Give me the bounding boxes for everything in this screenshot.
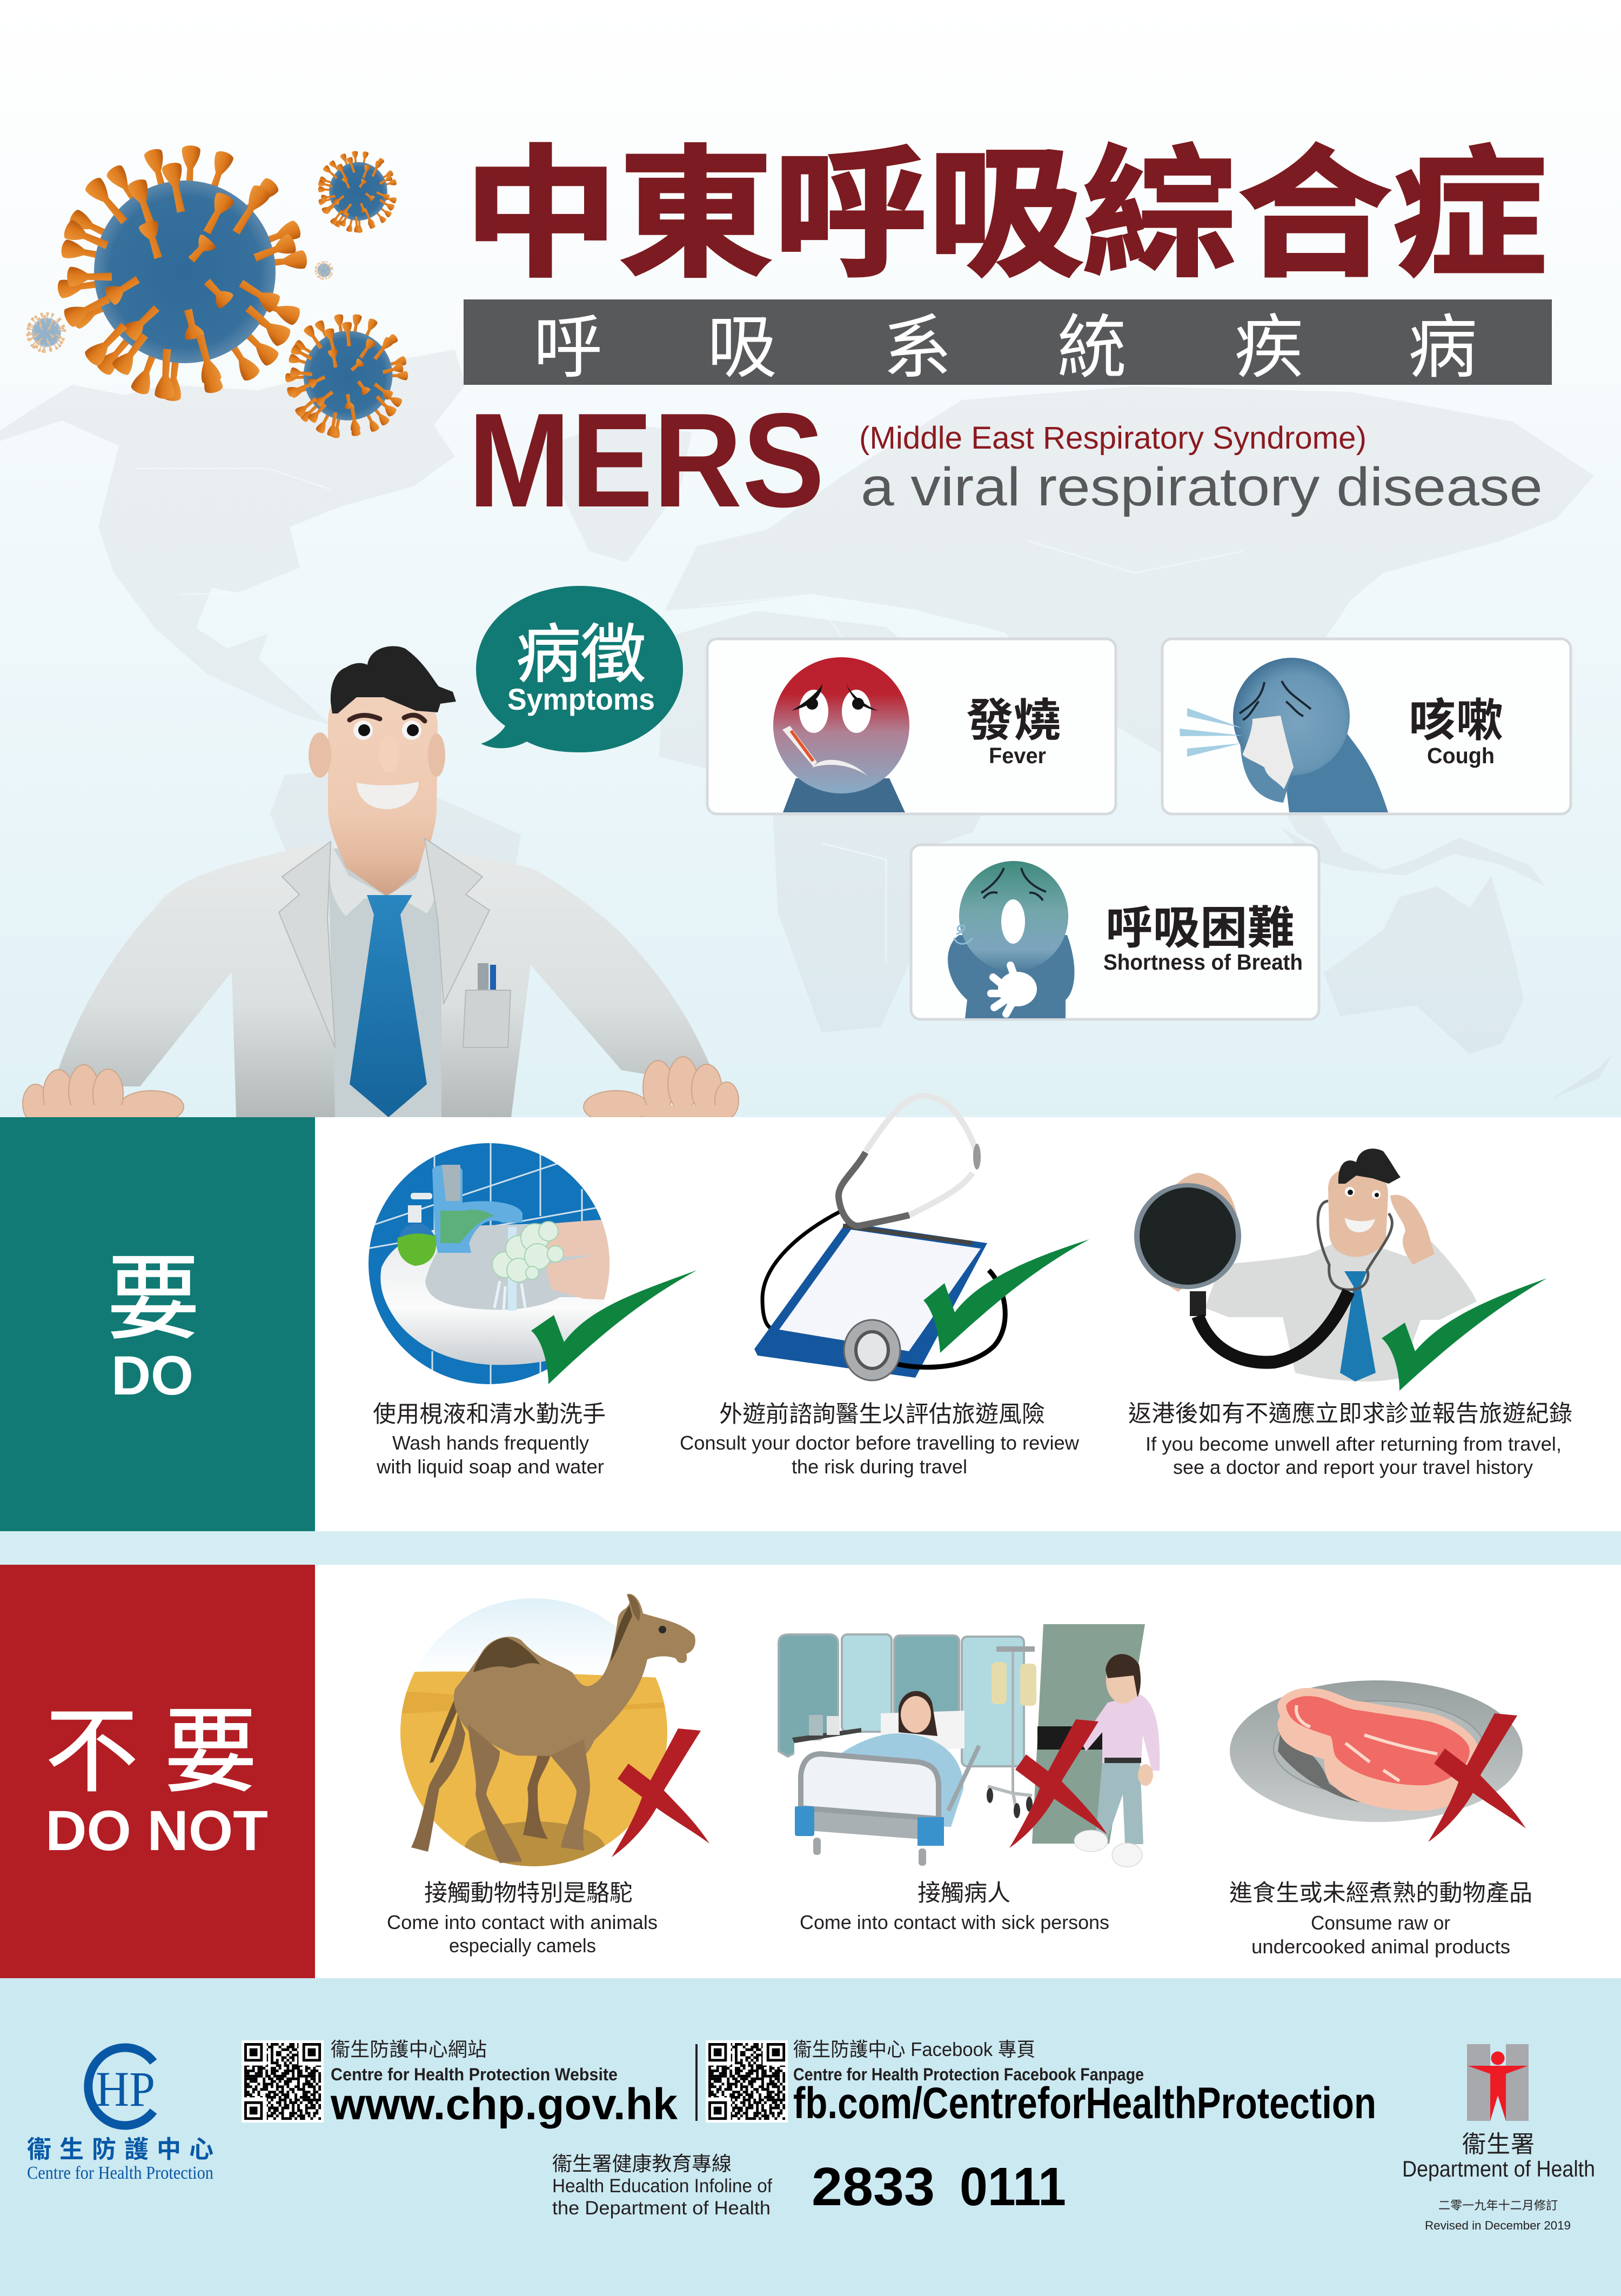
MERS heading: MERS (468, 385, 825, 535)
breath English label: Shortness of Breath (1103, 950, 1303, 975)
website info: Centre for Health Protection Website (331, 2065, 618, 2084)
CHP logo: Centre for Health Protection (27, 2163, 213, 2183)
subtitle bar: 吸 (707, 309, 776, 386)
symptom card: fever (707, 639, 1116, 814)
right arm (425, 842, 719, 1086)
panel: DO (0, 1096, 1621, 1531)
left arm (53, 845, 309, 1086)
subtitle bar: 病 (1408, 309, 1477, 386)
cross mark 2 (1009, 1719, 1107, 1848)
DO label block: DO (111, 1345, 193, 1406)
subtitle bar (464, 299, 1552, 386)
item: camel illustration (400, 1594, 695, 1875)
doctor character (23, 646, 739, 1123)
coat torso and arm (1205, 1243, 1421, 1381)
item 3 Chinese: 返港後如有不適應立即求診並報告旅遊紀錄 (1128, 1401, 1572, 1427)
item 5 English: Come into contact with sick persons (800, 1911, 1109, 1933)
subtitle bar: 疾 (1234, 309, 1303, 386)
item 1 Chinese: 使用梘液和清水勤洗手 (373, 1401, 606, 1427)
breath Chinese label: 呼吸困難 (1106, 903, 1295, 953)
item 1 English line 2: with liquid soap and water (376, 1456, 604, 1478)
item 3 English line 1: If you become unwell after returning from travel, (1146, 1433, 1562, 1455)
head and neck (328, 681, 438, 897)
revision date: 二零一九年十二月修訂 (1438, 2199, 1558, 2212)
item: raw meat illustration (1230, 1680, 1523, 1822)
ears (309, 732, 331, 778)
item: clipboard and stethoscope illustration (754, 1096, 1005, 1380)
meat (1277, 1688, 1479, 1811)
CHP logo: HP (96, 2061, 155, 2117)
item 1 English line 1: Wash hands frequently (392, 1432, 589, 1454)
raised sleeve (1399, 1242, 1477, 1320)
check mark 2 (923, 1239, 1089, 1353)
right hand (584, 1057, 739, 1123)
speech bubble: symptoms: 病徵 (516, 619, 646, 691)
cross mark 1 (612, 1728, 709, 1857)
door handle (1037, 1726, 1108, 1750)
item 4 English line 1: Come into contact with animals (387, 1911, 658, 1933)
visitor (1074, 1654, 1160, 1867)
DO NOT label block: DO NOT (45, 1799, 268, 1863)
Facebook info: fb.com/CentreforHealthProtection (793, 2079, 1376, 2128)
shirt (328, 849, 441, 1117)
infoline phone number: 0111 (960, 2157, 1066, 2217)
revision date (1425, 2199, 1571, 2232)
world map background (0, 350, 1612, 1113)
Department of Health name: 衞生署 (1462, 2131, 1535, 2158)
item: hospital ward illustration (779, 1624, 1160, 1867)
subtitle bar: 統 (1057, 309, 1127, 386)
speech bubble: symptoms: Symptoms (507, 682, 655, 716)
torso (232, 842, 531, 1117)
website info: 衞生防護中心網站 (331, 2038, 487, 2060)
footer background (0, 1978, 1621, 2296)
DO NOT label block: 不 (45, 1700, 138, 1804)
tie (350, 895, 427, 1117)
Department of Health name (1402, 2131, 1595, 2181)
fever English label: Fever (989, 743, 1046, 768)
virus: faded tiny centre (314, 261, 333, 280)
cough Chinese label: 咳嗽 (1409, 695, 1503, 746)
cough English label: Cough (1427, 743, 1495, 768)
subtitle bar: 呼 (533, 309, 602, 386)
left hand (23, 1065, 184, 1123)
virus: faded small left (26, 312, 66, 353)
speech bubble: symptoms (476, 586, 683, 752)
eyes (353, 720, 421, 740)
item: doctor with stethoscope illustration (1134, 1149, 1477, 1381)
item 4 English line 2: especially camels (449, 1934, 596, 1957)
fever character (773, 657, 909, 812)
bed (795, 1733, 979, 1866)
nose (379, 736, 399, 772)
item 4 Chinese: 接觸動物特別是駱駝 (424, 1880, 633, 1906)
check mark 1 (531, 1270, 697, 1384)
Facebook info: Centre for Health Protection Facebook Fanpage (793, 2065, 1144, 2084)
screens (779, 1634, 1024, 1766)
IV stand (987, 1646, 1036, 1818)
CHP logo: 衞生防護中心 (27, 2135, 213, 2163)
check mark 3 (1382, 1278, 1547, 1391)
collar (329, 840, 436, 916)
QR code: Facebook (706, 2040, 788, 2123)
symptom card: cough (1162, 639, 1571, 814)
health education infoline: the Department of Health (552, 2198, 771, 2219)
cross mark 3 (1428, 1713, 1526, 1842)
item 6 English line 2: undercooked animal products (1251, 1935, 1510, 1958)
right lapel (425, 838, 490, 1004)
item 5 Chinese: 接觸病人 (917, 1880, 1010, 1906)
item 6 English line 1: Consume raw or (1311, 1912, 1450, 1934)
cough character (1180, 658, 1388, 812)
eyebrows (350, 715, 425, 721)
fever Chinese label: 發燒 (966, 695, 1061, 746)
smile (357, 782, 419, 809)
virus: medium lower right (279, 308, 414, 445)
symptom card: shortness of breath (911, 845, 1319, 1019)
bedside table (792, 1715, 861, 1778)
virus: small upper right (312, 146, 403, 238)
item 2 English line 2: the risk during travel (792, 1456, 967, 1478)
health education infoline: Health Education Infoline of (552, 2175, 772, 2197)
full name in English: (Middle East Respiratory Syndrome) (859, 421, 1367, 456)
panel: DO NOT (0, 1565, 1621, 1978)
virus: large (57, 145, 308, 402)
pocket with pens (463, 963, 511, 1047)
infoline phone number (812, 2157, 1066, 2217)
website info (330, 2038, 678, 2129)
website info: www.chp.gov.hk (330, 2080, 678, 2129)
Facebook info: 衞生防護中心 Facebook 專頁 (793, 2038, 1035, 2060)
CHP logo (27, 2048, 213, 2183)
breath character (948, 861, 1074, 1018)
camel (411, 1594, 695, 1863)
item: wash hands illustration (369, 1143, 609, 1384)
DO NOT label block (0, 1565, 315, 1978)
DO label block: 要 (107, 1247, 200, 1351)
hair (331, 646, 456, 713)
Department of Health logo (1467, 2044, 1529, 2121)
virus illustrations (26, 145, 414, 445)
revision date: Revised in December 2019 (1425, 2219, 1571, 2232)
plate (1230, 1680, 1523, 1822)
health education infoline: 衞生署健康教育專線 (552, 2153, 732, 2175)
door (1032, 1624, 1145, 1844)
DO NOT label block: 要 (164, 1700, 257, 1804)
Facebook info (695, 2038, 1376, 2128)
title: Chinese: 中東呼吸綜合症 (464, 136, 1547, 294)
item 6 Chinese: 進食生或未經煮熟的動物產品 (1229, 1880, 1532, 1906)
disease description: a viral respiratory disease (861, 457, 1543, 517)
DO label block (0, 1117, 315, 1531)
Department of Health name: Department of Health (1402, 2156, 1595, 2181)
infoline phone number: 2833 (812, 2157, 935, 2217)
item 3 English line 2: see a doctor and report your travel history (1173, 1456, 1533, 1478)
left lapel (279, 842, 335, 1047)
health education infoline (552, 2153, 772, 2219)
item 2 English line 1: Consult your doctor before travelling to review (680, 1432, 1080, 1454)
patient (881, 1691, 964, 1751)
subtitle bar: 系 (883, 309, 952, 386)
QR code: website (242, 2040, 324, 2123)
item 2 Chinese: 外遊前諮詢醫生以評估旅遊風險 (719, 1401, 1045, 1427)
